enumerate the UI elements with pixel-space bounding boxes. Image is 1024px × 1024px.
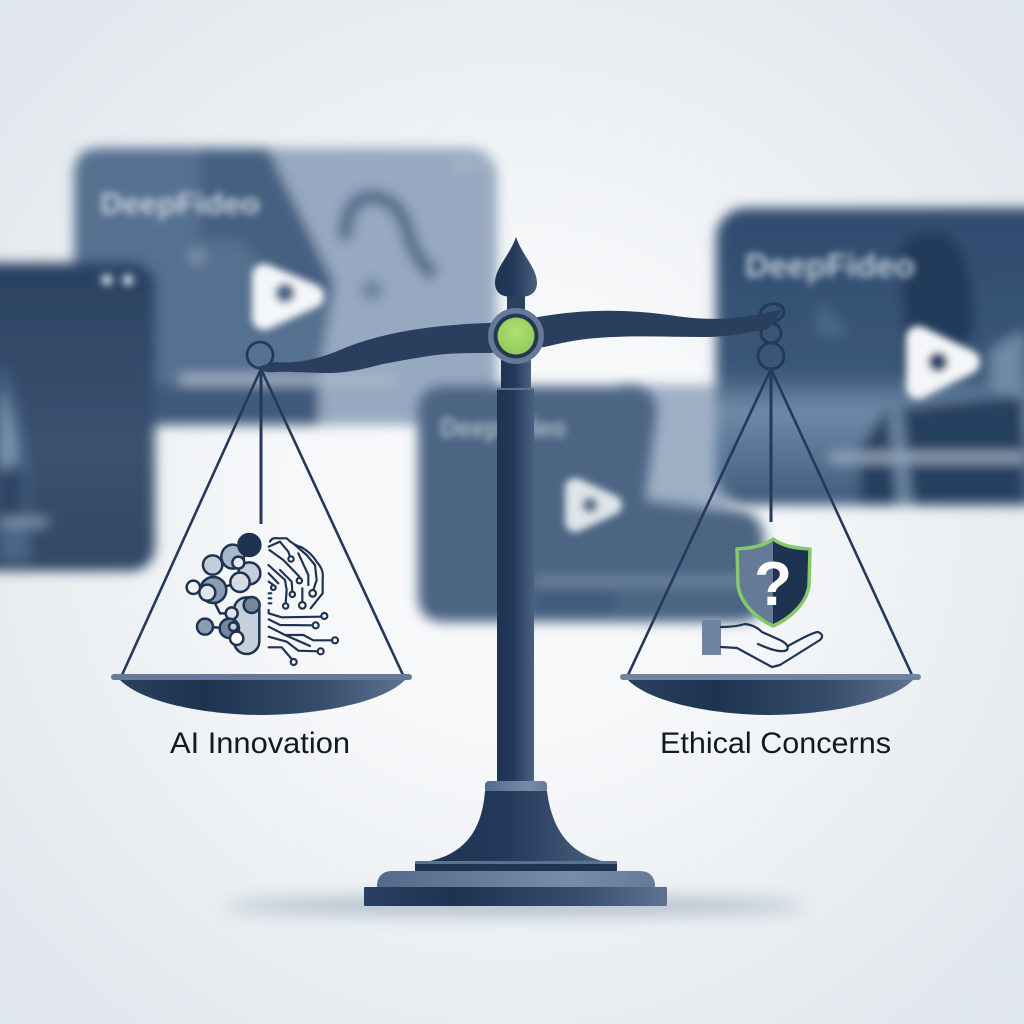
- panel: blurred video right: DeepFideo: [745, 247, 915, 284]
- neural half of brain: [187, 534, 260, 654]
- label: Ethical Concerns: Ethical Concerns: [660, 727, 891, 760]
- scale: balance beam: [248, 309, 782, 373]
- icon: AI brain with neural nodes and circuit traces: [187, 534, 338, 665]
- panel: blurred video centre: DeepFideo: [440, 412, 566, 443]
- scale: finial: [495, 237, 537, 316]
- panel: blurred video back centre-left: [74, 148, 497, 425]
- panel: blurred light backing block: [620, 385, 730, 510]
- right pan: [620, 674, 921, 715]
- panel: blurred video far left: [0, 263, 155, 571]
- scale: right rings and pan strings: [628, 301, 912, 675]
- ground shadow: [225, 897, 805, 915]
- left pan: [111, 674, 412, 715]
- panel: blurred video centre: [418, 386, 770, 622]
- scale: stand pillar and base: [364, 360, 667, 906]
- panel: blurred video right: [716, 208, 1024, 505]
- scale: left ring and pan strings: [122, 342, 403, 675]
- icon: shield with question mark: ?: [754, 550, 792, 619]
- icon: open hand: [702, 620, 822, 667]
- circuit half of brain: [268, 538, 338, 665]
- scale: pivot hub with green light: [488, 308, 544, 364]
- panel: blurred video back centre-left: DeepFideo: [100, 186, 260, 221]
- label: AI Innovation: AI Innovation: [170, 727, 350, 760]
- icon: shield with question mark: [737, 539, 810, 626]
